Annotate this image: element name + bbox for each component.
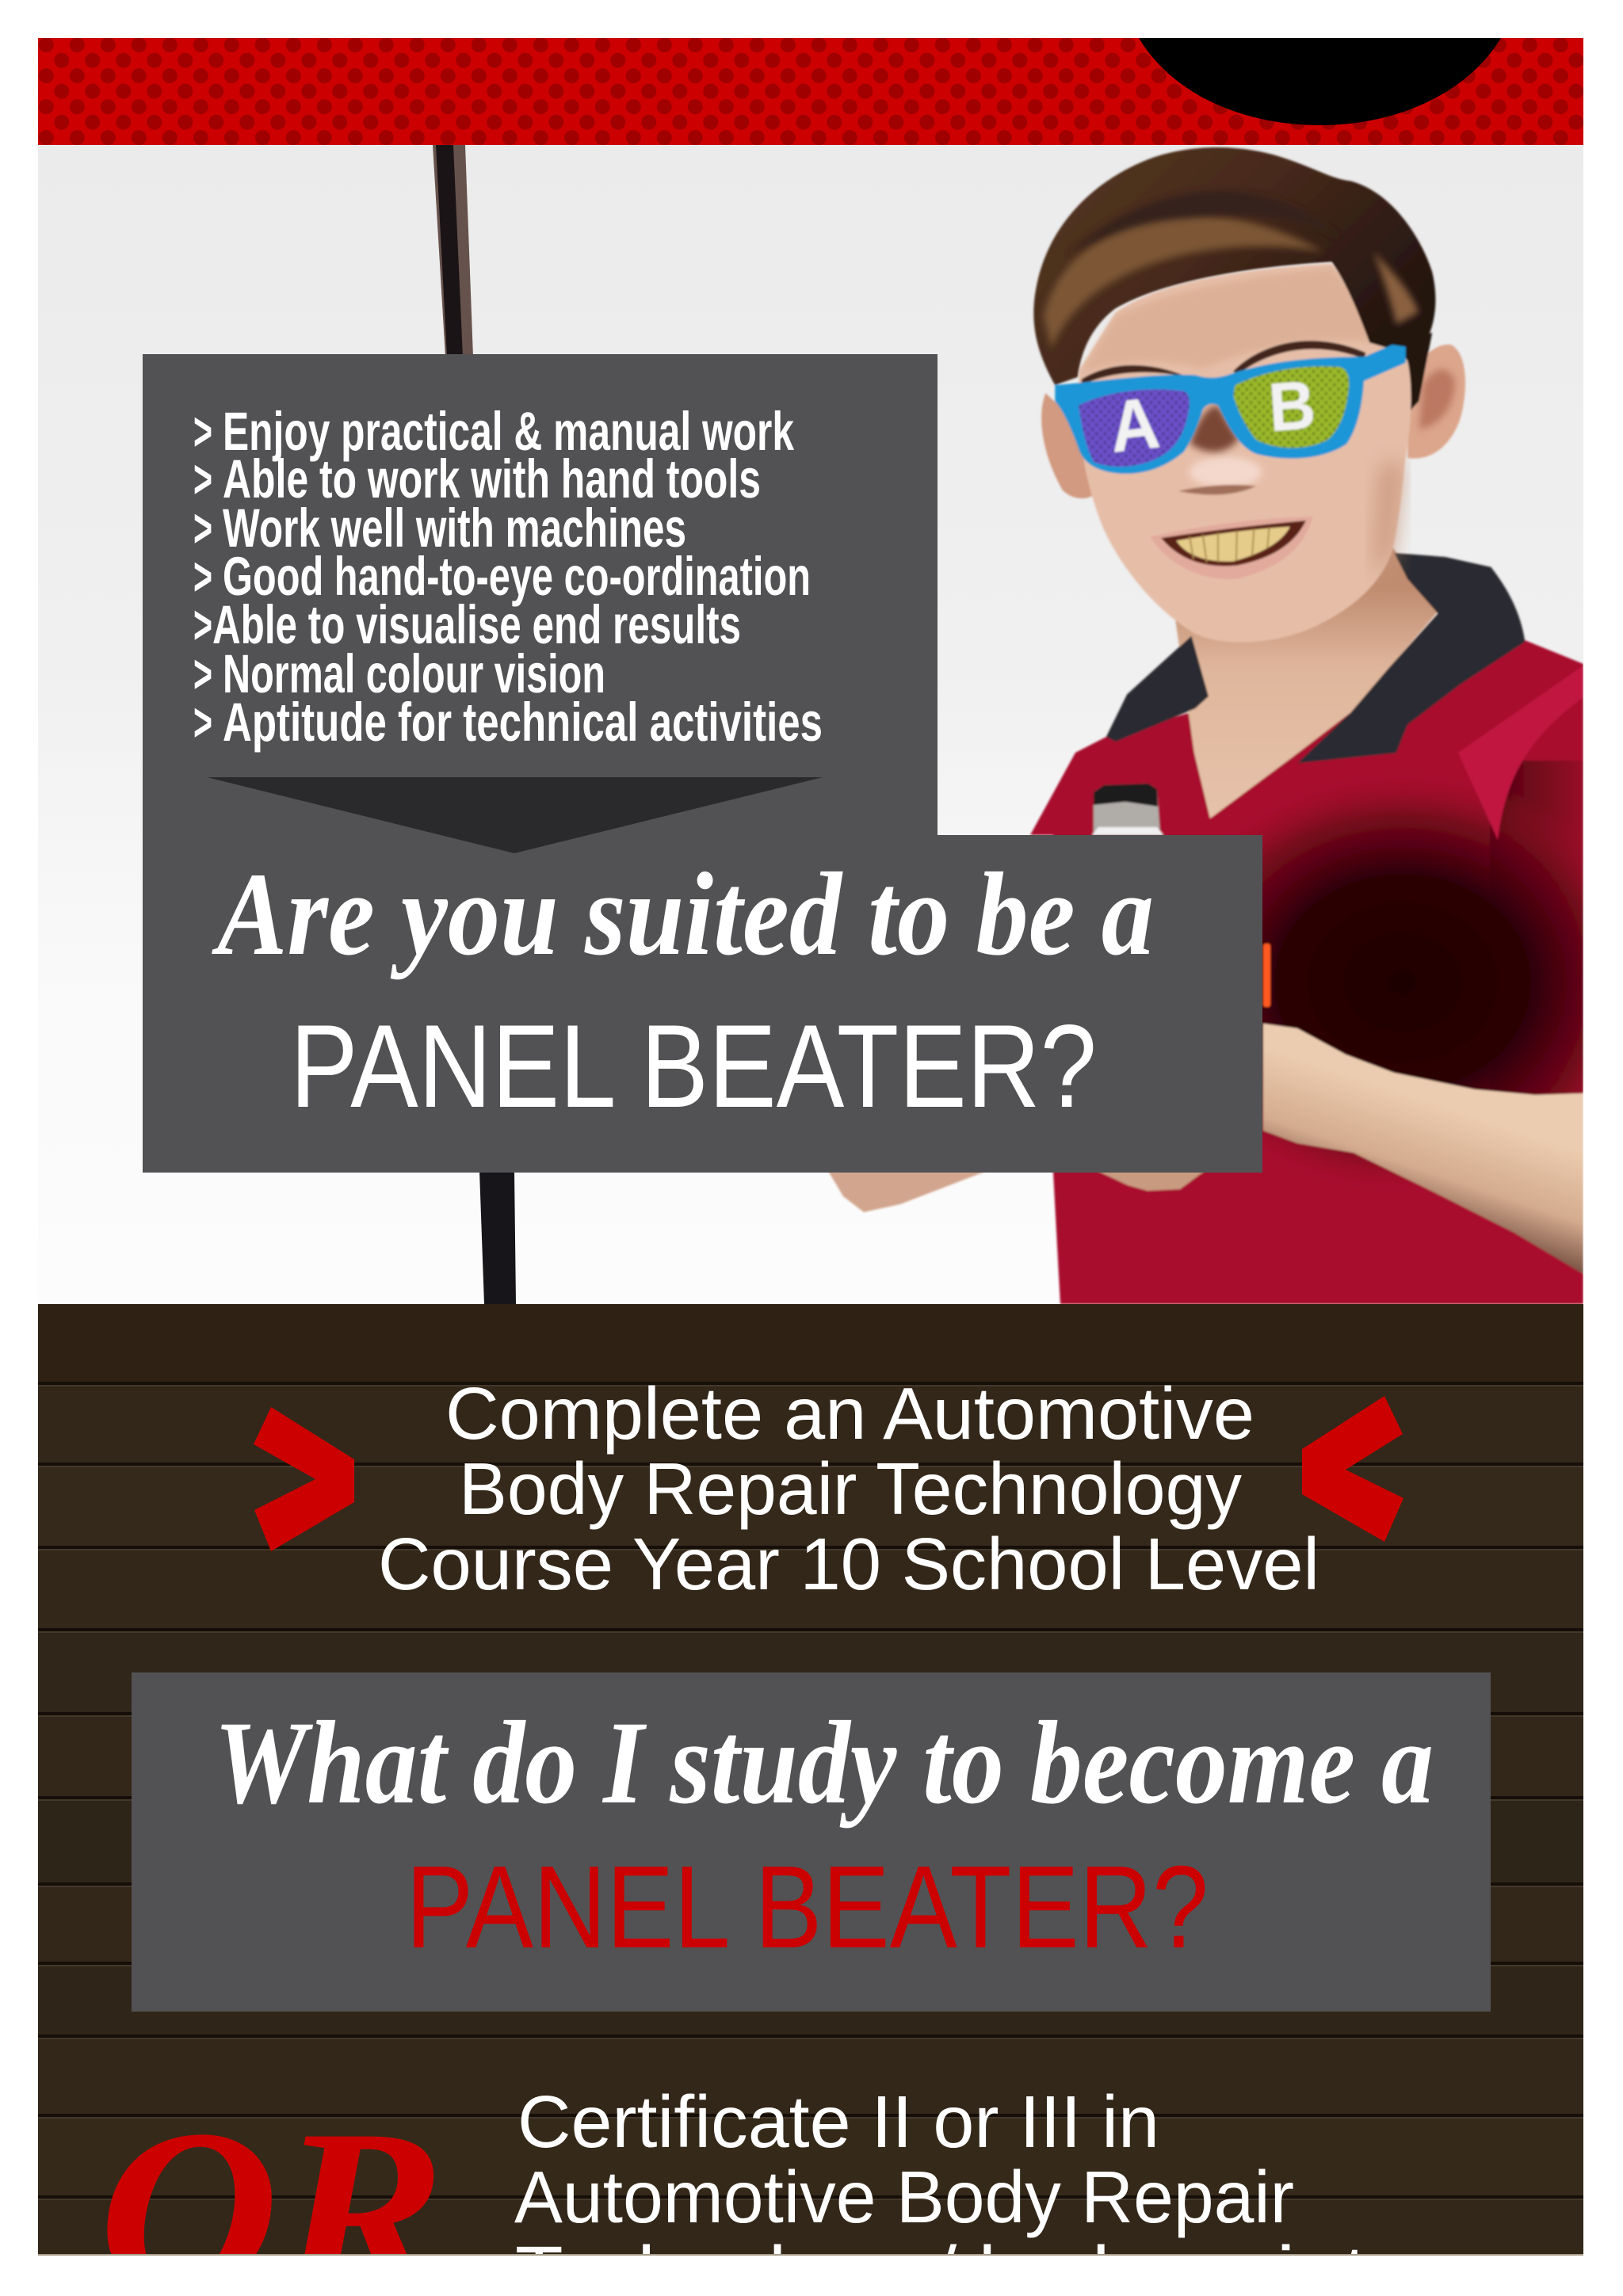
skill list: Work well with machines xyxy=(223,498,686,559)
sunglasses: B xyxy=(1266,366,1318,446)
neck xyxy=(1173,547,1438,818)
ear right xyxy=(1407,345,1465,459)
course text xyxy=(378,1372,1319,1605)
skill list: Able to work with hand tools xyxy=(223,448,761,509)
panel: wood background xyxy=(38,1304,1583,2296)
skill list: > xyxy=(193,448,212,509)
collar left xyxy=(1106,635,1209,742)
panel: photo background xyxy=(38,145,1623,1307)
lens A xyxy=(1079,390,1190,467)
lens letters: A xyxy=(1106,381,1163,468)
certificate text: Certificate II or III in xyxy=(517,2081,1159,2163)
skill list: > xyxy=(193,546,212,607)
person photo xyxy=(828,147,1623,1307)
ear left xyxy=(1041,393,1094,498)
nose shadow under bridge xyxy=(1190,406,1239,452)
heading: are you suited: Are you suited to be a xyxy=(212,849,1154,980)
fist xyxy=(1098,1171,1205,1191)
face xyxy=(1079,264,1411,643)
certificate text xyxy=(514,2081,1367,2296)
skill list: > xyxy=(193,692,212,753)
collar right xyxy=(1297,553,1525,763)
glasses frame xyxy=(1055,345,1406,474)
skill list: > xyxy=(193,643,212,704)
skill list: Able to visualise end results xyxy=(212,594,741,655)
course text: Body Repair Technology xyxy=(459,1447,1242,1530)
skill list: > xyxy=(193,498,212,559)
skill list: Aptitude for technical activities xyxy=(223,692,823,753)
course text: Course Year 10 School Level xyxy=(378,1523,1319,1605)
skill list: > xyxy=(193,594,212,655)
hair back xyxy=(1381,333,1432,527)
skill list: > xyxy=(193,401,212,462)
skill list: Normal colour vision xyxy=(223,643,605,704)
head and collar xyxy=(1033,147,1525,818)
panel: grey skills box xyxy=(143,354,938,861)
shirt xyxy=(1022,634,1623,1307)
heading: panel beater white: PANEL BEATER? xyxy=(290,1000,1097,1132)
eyebrows xyxy=(1082,365,1188,385)
panel: what do I study xyxy=(132,1672,1491,2012)
black semicircle xyxy=(1139,38,1501,125)
arrow: dark downward triangle xyxy=(207,777,823,853)
certificate text: Automotive Body Repair xyxy=(514,2156,1294,2238)
chevron left xyxy=(254,1407,354,1551)
panel: top red band xyxy=(38,38,1583,145)
sunglasses xyxy=(1055,345,1406,474)
skill list: Enjoy practical & manual work xyxy=(223,401,794,462)
course text: Complete an Automotive xyxy=(445,1372,1254,1455)
hand tool xyxy=(1092,784,1163,835)
lens B xyxy=(1233,366,1349,448)
hair xyxy=(1033,147,1435,385)
smile xyxy=(1150,517,1313,579)
chevron right xyxy=(1302,1396,1403,1542)
heading: what do I study: What do I study to become a xyxy=(214,1697,1434,1829)
left forearm xyxy=(828,1171,987,1212)
heading: panel beater red: PANEL BEATER? xyxy=(406,1842,1209,1973)
orange shirt logo xyxy=(1263,944,1270,1007)
backdrop pole xyxy=(433,145,516,1304)
panel: grey title box xyxy=(143,835,1262,1173)
skill list xyxy=(193,401,823,753)
skill list: Good hand-to-eye co-ordination xyxy=(223,546,811,607)
forearm xyxy=(1263,1024,1583,1274)
